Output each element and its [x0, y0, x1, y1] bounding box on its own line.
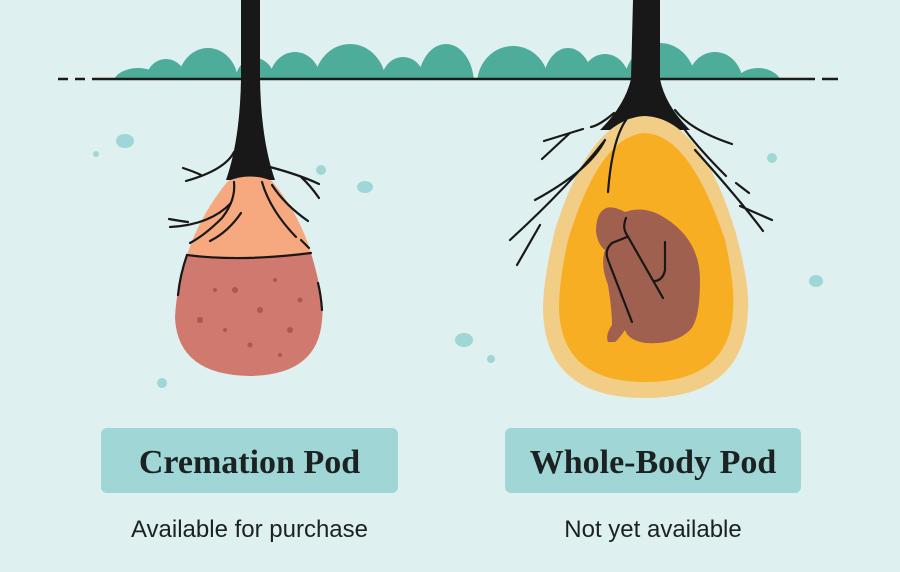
whole-body pod illustration [510, 0, 772, 398]
pod top (salmon) [187, 176, 311, 258]
subtitle: not yet: Not yet available [564, 516, 742, 543]
ground line [58, 78, 838, 80]
label: Whole-Body Pod: Whole-Body Pod [530, 444, 776, 481]
label: Whole-Body Pod [505, 428, 801, 493]
outer pod [543, 116, 748, 398]
pod bottom (soil) [175, 253, 323, 376]
tree trunk left [226, 0, 275, 180]
tree trunk right [600, 0, 690, 130]
figure [596, 207, 700, 343]
grass [115, 43, 780, 78]
subtitle: available: Available for purchase [131, 516, 368, 543]
cremation pod illustration [169, 0, 323, 376]
inner pod [559, 133, 733, 382]
soil specks [93, 134, 823, 388]
label: Cremation Pod [101, 428, 398, 493]
label: Cremation Pod: Cremation Pod [139, 444, 360, 481]
